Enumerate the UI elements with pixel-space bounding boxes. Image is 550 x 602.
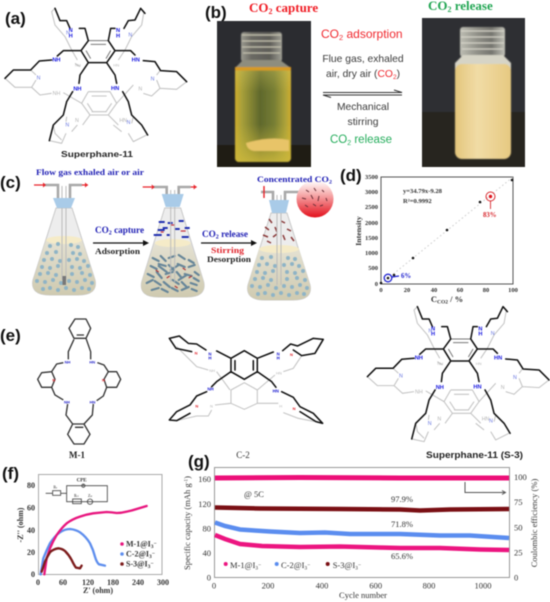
nitrogen labels: HN — [111, 86, 119, 92]
molecule: C-2: H — [208, 355, 211, 360]
panel d: calibration chart — [340, 166, 518, 306]
molecule: Superphane-11 (S-3): N — [428, 329, 432, 335]
x axis title: Cycle number — [339, 590, 387, 600]
desorption label: Desorption — [207, 254, 251, 264]
molecule: C-2: N — [290, 352, 293, 357]
panel f: Nyquist plot — [2, 464, 169, 595]
y axis title: Intensity — [354, 216, 363, 246]
legend: M-1@I — [230, 560, 255, 570]
legend: 3 — [304, 566, 307, 572]
CO2 capture label: capture — [112, 225, 144, 235]
molecule: Superphane-11 (S-3): N — [489, 418, 493, 424]
r squared: R²=0.9992 — [403, 198, 432, 205]
x tick labels: 120 — [82, 578, 94, 587]
molecule: C-2: N — [195, 403, 198, 408]
x axis title: C — [431, 294, 437, 304]
nitrogen labels: N — [65, 123, 69, 129]
legend: 3 — [151, 544, 154, 550]
CO2 release text: release — [351, 134, 392, 146]
molecule: M-1: NH — [64, 399, 70, 404]
y tick labels: 0 — [375, 281, 378, 288]
molecule: C-2: HN — [276, 371, 282, 376]
nitrogen labels: NH — [53, 91, 61, 97]
nitrogen labels: N — [127, 120, 131, 126]
x tick labels: 400 — [316, 580, 328, 590]
molecule: M-1 — [38, 319, 121, 444]
nitrogen labels: N — [138, 87, 142, 93]
adsorption label: Adsorption — [95, 246, 140, 256]
left tick labels: 120 — [198, 499, 211, 509]
C-2 label: C-2 — [236, 450, 250, 460]
nitrogen labels: H — [116, 33, 120, 39]
y tick labels: 80 — [27, 481, 35, 490]
molecule: Superphane-11 (S-3): H — [431, 332, 435, 338]
flask 1 — [33, 182, 95, 295]
panel b: CO2 capture and release vials — [205, 0, 525, 167]
circuit inset: Zw — [88, 493, 92, 498]
molecule: Superphane-11 (S-3): H — [478, 332, 482, 338]
molecule: C-2 — [169, 336, 323, 423]
panel c: flask process — [0, 168, 334, 300]
molecule: C-2: H — [279, 403, 282, 408]
circuit inset — [46, 479, 107, 504]
conditions text line 2: ) — [397, 69, 400, 80]
y tick labels — [365, 174, 378, 288]
legend: 3 — [255, 566, 258, 572]
nitrogen labels: NH — [75, 63, 81, 68]
y tick labels: 20 — [27, 548, 35, 557]
legend: − — [154, 541, 157, 547]
label d: (d) — [340, 166, 362, 185]
CO2 adsorption text: CO — [321, 27, 339, 41]
legend: − — [150, 561, 154, 567]
nitrogen labels: NH — [73, 87, 81, 93]
conditions text line 2: air, dry air (CO — [326, 69, 393, 80]
y tick labels: 3000 — [365, 189, 378, 196]
M-1 label: M-1 — [69, 450, 85, 460]
panel e: molecular structures — [0, 307, 549, 460]
retention labels: 97.9% — [391, 494, 413, 504]
CO2 release text: 2 — [347, 140, 351, 147]
legend: − — [307, 562, 310, 568]
flask 2 — [141, 184, 204, 297]
marker: 83 percent — [483, 192, 497, 219]
y tick labels: 1000 — [365, 250, 378, 257]
molecule: C-2: N — [293, 406, 296, 411]
molecule: Superphane-11 (S-3): N — [501, 385, 505, 391]
arrow: release — [201, 240, 257, 246]
y tick labels: 2000 — [365, 220, 378, 227]
left tick labels: 160 — [198, 474, 211, 484]
series lines — [215, 478, 509, 550]
legend: 3 — [148, 564, 151, 570]
nitrogen labels: HN — [113, 63, 119, 68]
molecule: Superphane-11 (S-3): NH — [436, 385, 444, 391]
S-3 label: Superphane-11 (S-3) — [426, 450, 523, 460]
fit line — [381, 177, 513, 284]
legend: − — [358, 562, 361, 568]
concentrated CO2 balloon — [296, 180, 334, 218]
molecule: Superphane-11 (S-3): N — [431, 326, 435, 332]
CO2 adsorption text: adsorption — [343, 27, 403, 41]
x tick labels: 600 — [369, 580, 382, 590]
legend: S-3@I — [126, 560, 148, 568]
molecule: M-1: HN — [90, 399, 96, 404]
right tick labels: 50 — [514, 522, 522, 532]
concentrated CO2 label: Concentrated CO — [257, 175, 320, 184]
left axis title: Specific capacity (mAh g — [182, 483, 192, 570]
nitrogen labels: N — [116, 28, 120, 34]
circuit inset: CPE — [77, 479, 87, 484]
heading: CO2 release: 2 — [448, 5, 452, 14]
equation: y=34.79x-9.28 — [403, 188, 443, 195]
label f: (f) — [2, 464, 19, 483]
nitrogen labels: N — [151, 77, 155, 83]
molecule: Superphane-11 (S-3): N — [399, 374, 403, 380]
legend: − — [258, 562, 261, 568]
photo: cloudy vial — [422, 18, 525, 167]
marker: 6 percent — [384, 273, 411, 282]
retention labels — [391, 494, 413, 561]
flask 3 — [248, 186, 310, 300]
x tick labels: 40 — [431, 287, 437, 294]
left tick labels: 80 — [202, 524, 211, 534]
x tick labels — [212, 580, 492, 590]
legend: 3 — [355, 566, 358, 572]
nitrogen labels: N — [128, 33, 132, 39]
heading: CO2 capture: 2 — [268, 7, 272, 16]
rate label: @ 5C — [244, 489, 264, 499]
nitrogen labels: HN — [119, 118, 127, 124]
legend — [120, 540, 157, 570]
left tick labels: 40 — [202, 548, 211, 558]
right tick labels: 25 — [514, 548, 522, 558]
molecule: M-1: N — [102, 377, 105, 382]
x tick labels: 180 — [107, 578, 119, 587]
label e: (e) — [0, 326, 21, 345]
molecule: C-2: H — [277, 355, 280, 360]
molecule: Superphane-11 — [5, 8, 187, 143]
conditions text line 2: 2 — [393, 74, 397, 81]
panel a: Superphane-11 structure — [5, 8, 187, 159]
y tick labels: 60 — [27, 504, 35, 512]
molecule: Superphane-11 (S-3) — [367, 307, 549, 442]
legend — [224, 560, 361, 572]
legend: 3 — [149, 554, 152, 560]
right axis title: Coulombic efficiency (%) — [529, 479, 539, 567]
marker: 6 percent: 6% — [401, 273, 411, 280]
y tick labels: 3500 — [365, 174, 378, 181]
left axis title: -1 — [184, 479, 190, 483]
y axis title: -Z'' (ohm) — [16, 507, 25, 542]
y tick labels: 1500 — [365, 235, 378, 242]
label b: (b) — [205, 3, 227, 22]
molecule: Superphane-11 (S-3): HN — [473, 384, 482, 390]
molecule: Superphane-11 (S-3): HN — [476, 361, 482, 366]
heading: CO2 capture: CO — [249, 0, 268, 15]
x tick labels: 240 — [132, 578, 144, 587]
CO2 release label: CO — [202, 229, 216, 239]
equilibrium arrows — [323, 90, 402, 98]
CO2 release label: release — [219, 229, 248, 239]
left axis title: ) — [182, 476, 192, 479]
molecule: C-2: NH — [207, 387, 214, 392]
x tick labels: 60 — [457, 287, 463, 294]
CO2 capture label: 2 — [109, 230, 112, 236]
left tick labels: 0 — [207, 572, 211, 582]
x tick labels: 800 — [423, 580, 435, 590]
nitrogen labels: H — [69, 33, 73, 39]
panel g: cycling chart — [182, 452, 539, 600]
molecule: Superphane-11 (S-3): N — [428, 421, 432, 427]
x tick labels: 0 — [36, 578, 40, 587]
x axis title: CO2 — [437, 300, 448, 306]
molecule: Superphane-11 (S-3): N — [478, 326, 482, 332]
molecule: Superphane-11 (S-3): HN — [494, 356, 502, 362]
concentrated CO2 label: 2 — [329, 180, 332, 186]
y tick labels — [27, 481, 35, 579]
x tick labels: 200 — [262, 580, 274, 590]
molecule: M-1: N — [52, 377, 55, 382]
stirring text: Mechanical — [337, 102, 389, 113]
CO2 capture label: CO — [95, 225, 109, 235]
molecule: M-1: NH — [65, 360, 71, 365]
plot frame — [38, 474, 162, 574]
x tick labels: 100 — [508, 287, 518, 294]
molecule: C-2: NH — [209, 368, 215, 373]
x tick labels — [379, 287, 518, 294]
legend: C-2@I — [126, 550, 149, 558]
molecule: C-2: N — [208, 351, 211, 356]
retention labels: 65.6% — [391, 551, 413, 561]
molecule: Superphane-11 (S-3): NH — [437, 361, 443, 366]
nitrogen labels: N — [69, 28, 73, 34]
flow gas label: Flow gas exhaled air or air — [36, 168, 144, 177]
nitrogen labels: N — [75, 118, 79, 124]
conditions text: Flue gas, exhaled — [322, 54, 404, 65]
x tick labels: 1000 — [474, 580, 492, 590]
CO2 adsorption text: 2 — [339, 33, 343, 42]
caption: Superphane-11 — [61, 149, 133, 159]
legend: M-1@I — [126, 540, 151, 548]
curves — [41, 506, 147, 574]
x tick labels: 0 — [379, 287, 383, 294]
right tick labels — [514, 472, 527, 582]
CO2 release label: 2 — [216, 234, 219, 240]
molecule: Superphane-11 (S-3): HN — [482, 416, 490, 422]
x axis title: / % — [448, 294, 463, 304]
label a: (a) — [5, 9, 26, 28]
molecule: C-2: N — [277, 351, 280, 356]
nitrogen labels: N — [37, 75, 41, 81]
y tick labels: 40 — [27, 526, 35, 535]
molecule: Superphane-11 (S-3): NH — [415, 356, 423, 362]
x tick labels — [36, 578, 169, 587]
molecule: C-2: N — [195, 350, 198, 355]
stirring label: Stirring — [211, 245, 245, 255]
molecule: Superphane-11 (S-3): N — [437, 416, 441, 422]
x axis title: Z' (ohm) — [83, 586, 113, 595]
x tick labels: 80 — [483, 287, 489, 294]
label c: (c) — [0, 173, 21, 192]
legend: C-2@I — [281, 560, 304, 570]
retention labels: 71.8% — [391, 519, 413, 529]
right tick labels: 0 — [514, 572, 518, 582]
data points — [380, 179, 513, 284]
x tick labels: 0 — [212, 580, 216, 590]
x tick labels: 60 — [59, 578, 67, 587]
plot frame — [214, 468, 510, 578]
y tick labels: 500 — [368, 265, 378, 272]
y tick labels: 2500 — [365, 204, 378, 211]
right tick labels: 100 — [514, 472, 527, 482]
right tick labels: 75 — [514, 497, 522, 507]
molecule: C-2: HN — [273, 389, 279, 394]
molecule: Superphane-11 (S-3): N — [491, 331, 495, 337]
nitrogen labels — [37, 28, 155, 129]
circuit inset: Rs — [53, 485, 57, 490]
left tick labels — [198, 474, 211, 582]
photo: clear vial — [217, 21, 311, 167]
axis arrow — [465, 482, 506, 494]
x tick labels: 300 — [157, 578, 169, 587]
plot frame — [381, 177, 513, 284]
legend: − — [152, 551, 155, 557]
CO2 release text: CO — [330, 134, 347, 146]
marker: 83 percent: 83% — [483, 212, 497, 219]
y tick labels: 0 — [31, 570, 35, 579]
molecule: Superphane-11 (S-3): N — [513, 375, 517, 381]
label g: (g) — [188, 452, 210, 471]
circuit inset: Rct — [74, 493, 79, 498]
arrow: capture — [93, 240, 149, 246]
molecule: C-2: N — [210, 403, 213, 408]
legend: S-3@I — [333, 560, 355, 570]
nitrogen labels: N — [66, 30, 70, 36]
molecule: M-1: HN — [89, 360, 95, 365]
x tick labels: 20 — [404, 287, 410, 294]
heading: CO2 capture: capture — [272, 0, 318, 15]
nitrogen labels: HN — [132, 57, 140, 63]
molecule: Superphane-11 (S-3): NH — [415, 389, 423, 395]
nitrogen labels: NH — [52, 57, 60, 63]
stirring text line 2: stirring — [348, 117, 379, 128]
